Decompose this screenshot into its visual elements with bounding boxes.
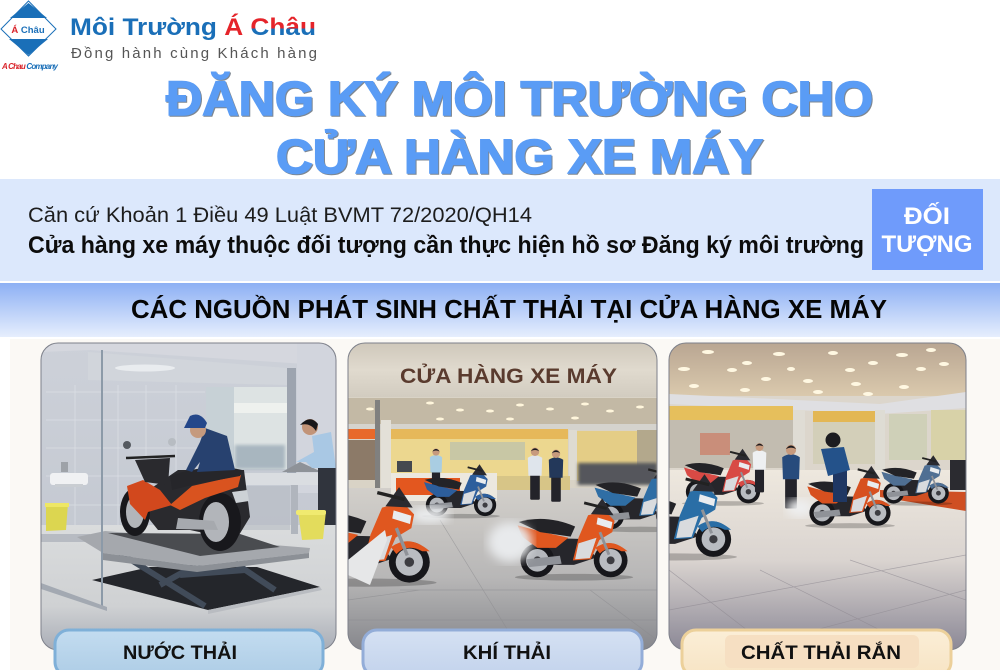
label: emissions: [363, 630, 642, 670]
ceiling: [348, 398, 657, 426]
window: [234, 387, 287, 469]
mechanic: [184, 415, 235, 472]
red display platform: [880, 490, 966, 511]
sink: [50, 462, 88, 487]
rider: [821, 432, 850, 502]
company name: Môi Trường Á Châu: [70, 13, 316, 41]
scissor lift: [120, 553, 275, 606]
blue motorbike back: [422, 464, 500, 518]
ridden motorbike: [805, 432, 895, 528]
pit: [92, 567, 320, 610]
staff: [430, 448, 442, 486]
left bucket: [45, 503, 69, 531]
panel outlines: [41, 343, 966, 650]
panel: wastewater scene: [41, 343, 336, 650]
title: [166, 71, 873, 184]
label: solid waste: [682, 630, 951, 670]
ceiling: [44, 344, 297, 363]
section heading: CÁC NGUỒN PHÁT SINH CHẤT THẢI TẠI CỬA HÀNG XE MÁY: [131, 293, 887, 324]
legal citation: Căn cứ Khoản 1 Điều 49 Luật BVMT 72/2020/QH14: [28, 204, 532, 227]
platform: [77, 531, 310, 572]
company caption: A Chau Company: [1, 62, 59, 71]
shop windows: [669, 410, 966, 470]
logo: [1, 1, 317, 71]
glass partition: [41, 350, 107, 611]
counter: [242, 462, 318, 534]
shop sign: [355, 344, 649, 383]
staff member: [753, 443, 766, 492]
badge: đối tượng: [872, 189, 983, 270]
customer: [782, 445, 800, 509]
blue motorbike right: [594, 468, 656, 532]
red scooter: [682, 449, 764, 506]
icon: company diamond: [1, 1, 56, 56]
floor: [41, 525, 336, 650]
orange motorbike front: [515, 498, 633, 581]
badge: đối tượng: TƯỢNG: [882, 231, 972, 258]
right worker: [296, 419, 336, 525]
panel: solid waste scene: [670, 344, 966, 649]
background motorbikes: [578, 463, 657, 485]
right bucket: [296, 510, 326, 540]
smoke: [786, 499, 814, 517]
blue motorbike foreground: [613, 474, 737, 560]
section heading: [0, 283, 1000, 337]
label: wastewater: NƯỚC THẢI: [123, 640, 237, 664]
badge: đối tượng: ĐỐI: [904, 202, 950, 230]
label: solid waste: CHẤT THẢI RẮN: [741, 640, 901, 664]
ceiling with lights: [669, 343, 966, 396]
tagline: Đồng hành cùng Khách hàng: [71, 45, 317, 62]
subject statement: Cửa hàng xe máy thuộc đối tượng cần thực hiện hồ sơ Đăng ký môi trường: [28, 232, 864, 259]
smoke: orange bike: [488, 522, 532, 562]
title: ĐĂNG KÝ MÔI TRƯỜNG CHO: [166, 71, 873, 126]
label: emissions: KHÍ THẢI: [463, 641, 551, 664]
motorbike: [120, 415, 250, 551]
wall beam: [669, 392, 966, 414]
floor: [348, 488, 657, 650]
shop sign: CỬA HÀNG XE MÁY: [400, 364, 617, 388]
smoke: blue bike: [410, 507, 450, 523]
large motorbike left: [348, 487, 436, 587]
back wall: [391, 439, 568, 476]
title: CỬA HÀNG XE MÁY: [276, 129, 763, 184]
panel: emissions scene: [348, 344, 656, 649]
cream backdrop: [10, 339, 1000, 670]
floor: [669, 470, 966, 650]
icon: company diamond: Á Châu: [11, 25, 45, 36]
label: wastewater: [55, 630, 323, 670]
service counter: [391, 461, 570, 501]
panel: legal basis: [0, 179, 1000, 281]
display motorbikes: [880, 455, 952, 506]
